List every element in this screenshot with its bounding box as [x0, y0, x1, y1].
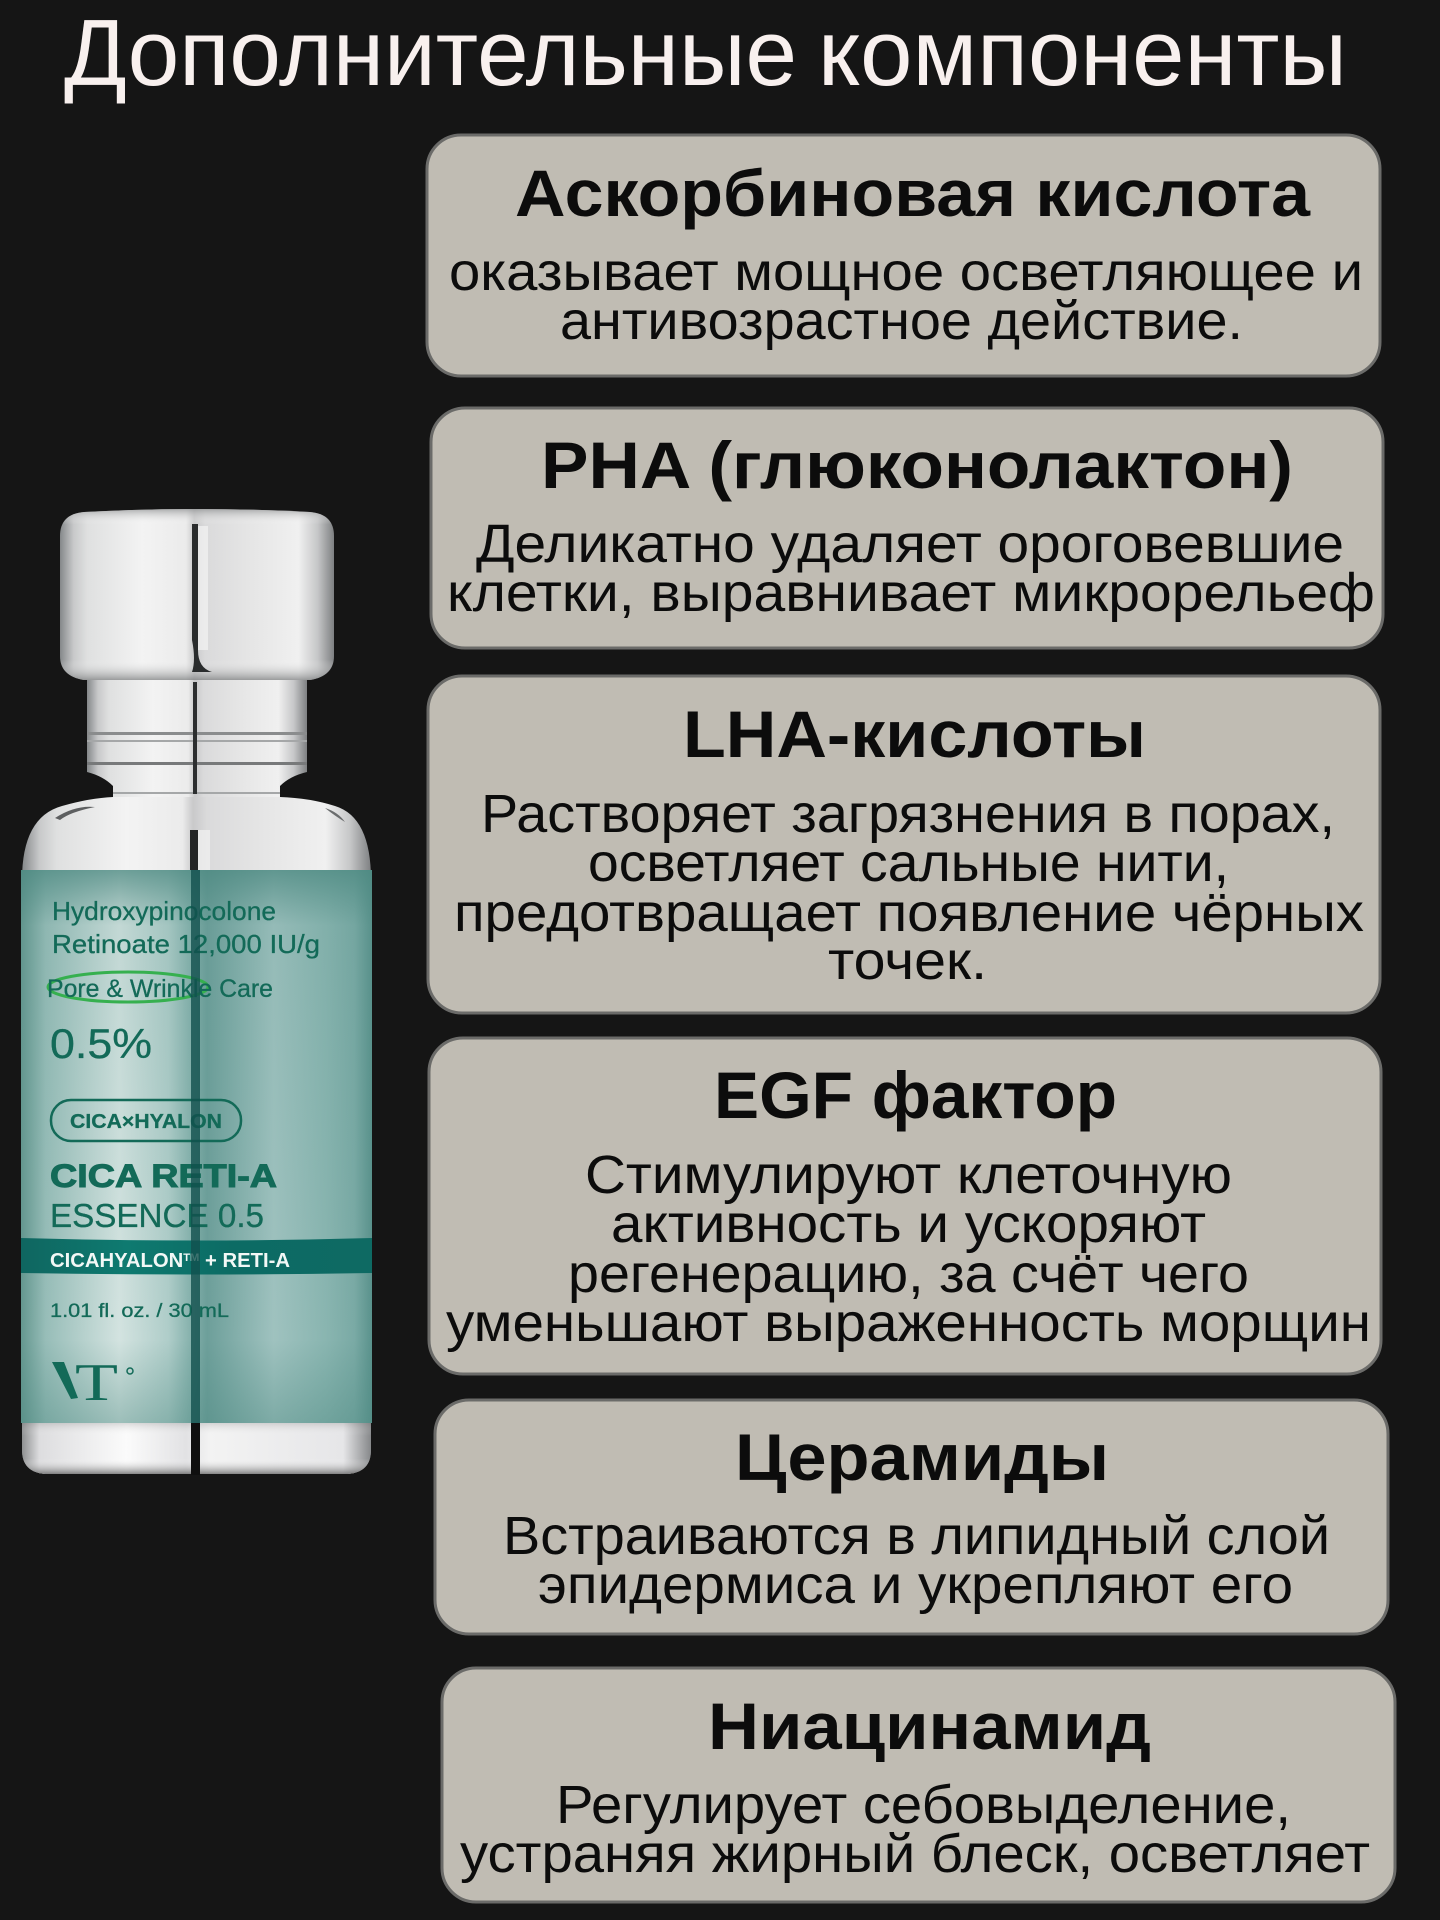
description	[460, 1775, 1370, 1884]
description: осветляет сальные нити,	[588, 833, 1229, 893]
description: оказывает мощное осветляющее и	[449, 242, 1363, 302]
label logo: T	[75, 1354, 118, 1412]
bottle body	[22, 797, 371, 1474]
description: Встраиваются в липидный слой	[503, 1506, 1330, 1566]
description: Регулирует себовыделение,	[556, 1775, 1291, 1835]
heading: EGF фактор	[714, 1058, 1117, 1132]
title: компоненты	[818, 0, 1347, 105]
description: Стимулируют клеточную	[585, 1145, 1232, 1205]
teal label	[21, 870, 372, 1423]
product bottle	[21, 509, 372, 1475]
description: эпидермиса и укрепляют его	[538, 1555, 1293, 1615]
description: точек.	[828, 931, 987, 991]
description	[446, 1145, 1371, 1353]
label volume: 1.01 fl. oz. / 30 mL	[50, 1301, 229, 1322]
label text: pore and wrinkle care: Pore & Wrinkle Care	[47, 975, 273, 1003]
description	[503, 1506, 1330, 1615]
label pill	[51, 1100, 241, 1141]
label product name	[50, 1158, 277, 1234]
description: уменьшают выраженность морщин	[446, 1293, 1371, 1353]
label product name: ESSENCE 0.5	[50, 1197, 264, 1234]
description: устраняя жирный блеск, осветляет	[460, 1824, 1370, 1884]
label band	[21, 1238, 372, 1274]
description: регенерацию, за счёт чего	[568, 1244, 1249, 1304]
panel: niacinamide	[442, 1668, 1395, 1902]
panel: ceramides	[435, 1400, 1388, 1634]
label pill: CICA×HYALON	[70, 1111, 222, 1133]
label band: + RETI-A	[199, 1250, 290, 1272]
heading: Ниацинамид	[708, 1689, 1151, 1763]
description	[449, 242, 1363, 351]
heading: Церамиды	[735, 1420, 1109, 1494]
description	[454, 784, 1364, 991]
panel: ascorbic acid	[427, 135, 1380, 376]
description: антивозрастное действие.	[560, 291, 1243, 351]
bottle base	[22, 1423, 371, 1475]
label text: ingredient: Hydroxypinocolone	[52, 896, 276, 926]
heading: Аскорбиновая кислота	[515, 156, 1311, 230]
title	[64, 0, 1347, 105]
bottle cap	[60, 509, 334, 680]
description: Деликатно удаляет ороговевшие	[476, 514, 1344, 574]
label band: TM	[183, 1252, 199, 1264]
description	[447, 514, 1375, 623]
heading: LHA-кислоты	[683, 697, 1146, 771]
label text: ingredient	[52, 896, 320, 959]
description: предотвращает появление чёрных	[454, 883, 1364, 943]
label text: ingredient: Retinoate 12,000 IU/g	[52, 929, 320, 959]
label band: CICAHYALON	[50, 1250, 182, 1272]
panel: EGF	[429, 1038, 1381, 1374]
bottle neck	[87, 680, 307, 797]
description: активность и ускоряют	[611, 1194, 1206, 1254]
description: клетки, выравнивает микрорельеф	[447, 563, 1375, 623]
panel: PHA	[431, 408, 1383, 648]
heading: PHA (глюконолактон)	[541, 428, 1293, 502]
title: Дополнительные	[64, 0, 797, 105]
panel: LHA	[428, 676, 1380, 1013]
label logo	[52, 1354, 133, 1412]
description: Растворяет загрязнения в порах,	[481, 784, 1335, 844]
label seam	[191, 870, 200, 1423]
label product name: CICA RETI-A	[50, 1158, 277, 1194]
label text: percent: 0.5%	[50, 1020, 152, 1067]
